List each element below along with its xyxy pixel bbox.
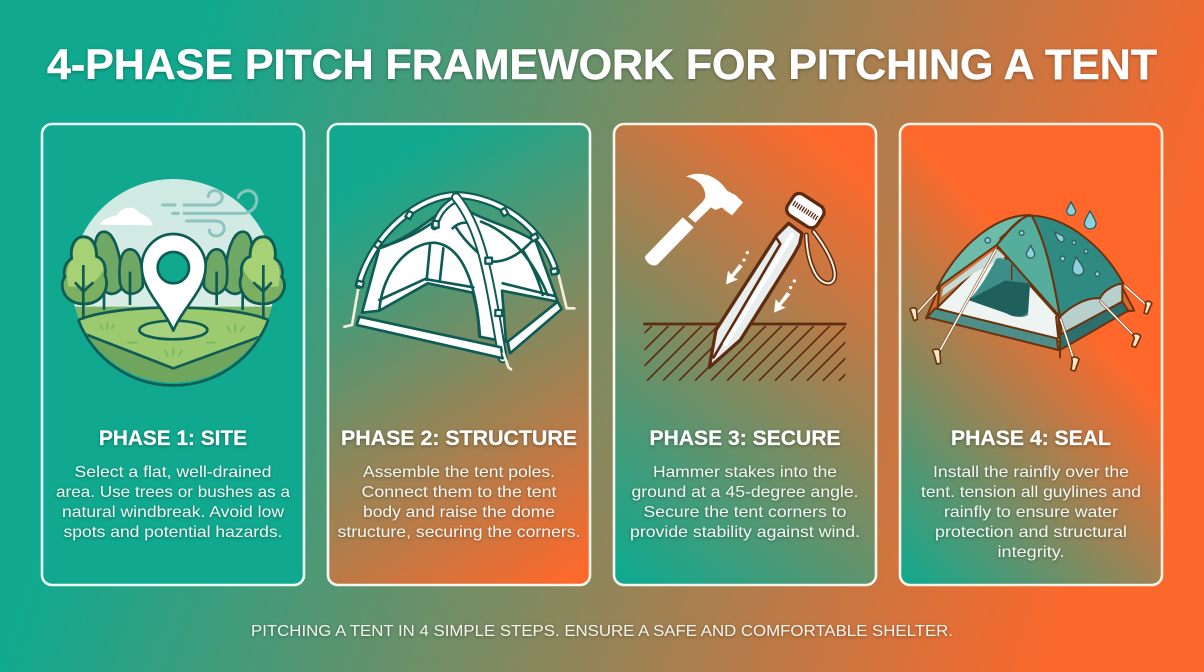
body text — [338, 464, 580, 541]
body text — [56, 464, 290, 541]
icon: map pin in landscape — [62, 179, 284, 393]
body text: rainfly to ensure water — [944, 504, 1119, 521]
pegs — [910, 301, 1152, 371]
panel: phase 3 secure — [614, 124, 876, 585]
loop — [806, 232, 835, 283]
body text: protection and structural — [935, 524, 1127, 541]
heading: PHASE 4: SEAL — [951, 426, 1111, 450]
body text — [630, 464, 860, 541]
arrows — [726, 251, 796, 313]
body text: integrity. — [998, 544, 1064, 561]
body text: body and raise the dome — [363, 504, 555, 521]
icon: tent with rainfly — [910, 202, 1152, 371]
body text: Secure the tent corners to — [644, 504, 847, 521]
rain drops — [985, 202, 1100, 276]
body text: ground at a 45-degree angle. — [632, 484, 858, 501]
icon: hammer and stake — [644, 174, 848, 381]
body text — [921, 464, 1141, 561]
heading: PHASE 1: SITE — [99, 426, 247, 450]
panel: phase 4 seal — [900, 124, 1162, 585]
body text: spots and potential hazards. — [64, 524, 282, 541]
stake — [709, 223, 802, 367]
panel: phase 1 site — [42, 124, 304, 585]
body text: structure, securing the corners. — [338, 524, 580, 541]
body text: area. Use trees or bushes as a — [56, 484, 290, 501]
panel: phase 2 structure — [328, 124, 590, 585]
body text: Select a flat, well-drained — [74, 464, 272, 481]
body text: Hammer stakes into the — [653, 464, 837, 481]
body text: Install the rainfly over the — [933, 464, 1129, 481]
heading: PHASE 2: STRUCTURE — [341, 426, 577, 450]
body text: Connect them to the tent — [362, 484, 557, 501]
body text: natural windbreak. Avoid low — [62, 504, 284, 521]
hammer — [645, 174, 743, 265]
body text: provide stability against wind. — [630, 524, 860, 541]
body text: tent. tension all guylines and — [921, 484, 1141, 501]
trees right — [204, 232, 284, 319]
footer caption: PITCHING A TENT IN 4 SIMPLE STEPS. ENSURE A SAFE AND COMFORTABLE SHELTER. — [251, 623, 953, 640]
heading: PHASE 3: SECURE — [650, 426, 840, 450]
icon: tent frame — [344, 195, 574, 369]
title: 4-PHASE PITCH FRAMEWORK FOR PITCHING A TENT — [47, 41, 1157, 89]
trees left — [62, 232, 143, 319]
body text: Assemble the tent poles. — [363, 464, 555, 481]
ground hatch — [644, 324, 848, 381]
